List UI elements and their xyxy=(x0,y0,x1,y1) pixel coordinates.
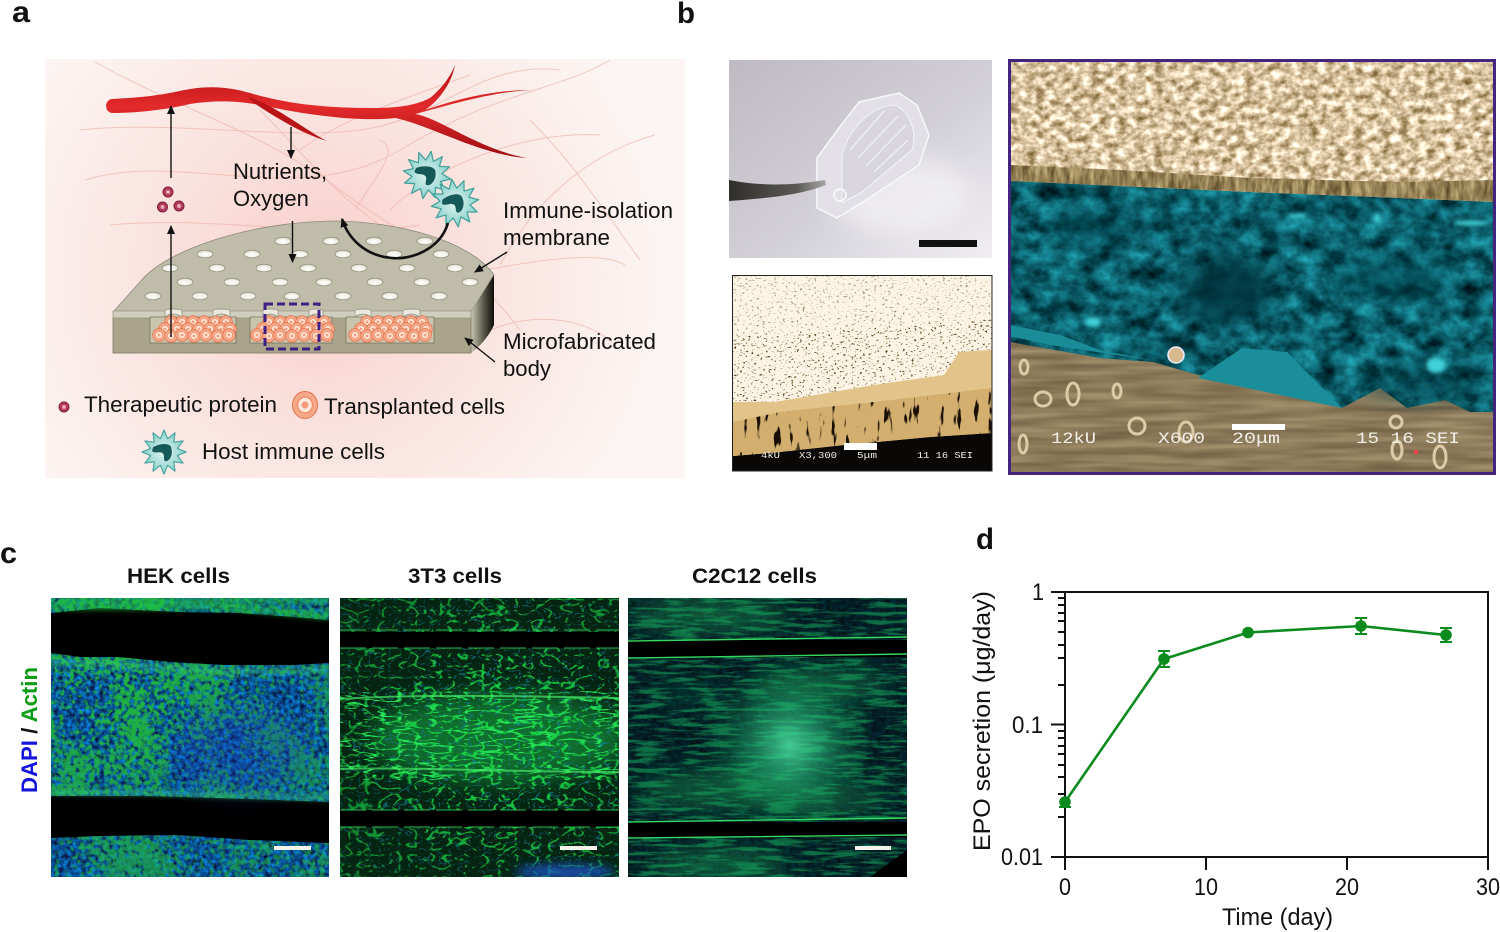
label: nutrients and oxygen: Nutrients, xyxy=(233,159,327,184)
panel d: EPO secretion line chart xyxy=(969,579,1500,931)
label: immune-isolation membrane: membrane xyxy=(503,225,610,250)
panel b: device photo xyxy=(729,60,992,258)
transplanted cells in wells xyxy=(153,316,432,342)
vertical label: DAPI / Actin: DAPI / Actin xyxy=(17,667,42,793)
3T3 scale bar xyxy=(560,846,597,850)
y tick labels: 0.1 xyxy=(1012,712,1043,739)
label: nutrients and oxygen: Oxygen xyxy=(233,186,309,211)
micrograph: C2C12 cells xyxy=(628,598,907,877)
x tick labels: 10 xyxy=(1194,874,1218,901)
SEM 2 annotation: 12kU xyxy=(1051,430,1096,448)
device photo body xyxy=(817,93,929,218)
x tick labels: 20 xyxy=(1335,874,1359,901)
y tick labels: 0.01 xyxy=(1001,844,1043,871)
SEM 1 annotation: 11 16 SEI xyxy=(917,451,973,461)
3T3 black channels xyxy=(340,632,619,827)
wells xyxy=(150,317,434,343)
y tick labels: 1 xyxy=(1032,579,1044,606)
y axis ticks xyxy=(1051,592,1065,857)
debris particles xyxy=(1019,360,1446,468)
panel a background xyxy=(45,59,685,478)
legend: therapeutic protein: Therapeutic protein xyxy=(84,392,277,417)
SEM 1 scale bar xyxy=(844,443,877,450)
membrane cross-section pores xyxy=(165,309,420,317)
label: microfabricated body xyxy=(503,329,656,381)
micrograph: HEK cells xyxy=(51,598,329,877)
panel letter c: c xyxy=(0,537,17,570)
label: microfabricated body: body xyxy=(503,356,552,381)
legend: transplanted cells: Transplanted cells xyxy=(324,394,505,419)
C2C12 black channels xyxy=(628,640,907,877)
SEM 2 annotation: X600 xyxy=(1158,430,1205,448)
bottom substrate xyxy=(1011,342,1493,472)
therapeutic protein particles xyxy=(158,187,184,212)
arrow: immune cells blocked xyxy=(342,219,448,258)
panel letter d: d xyxy=(976,523,994,556)
cross-section wall xyxy=(733,340,992,456)
faint tissue capillaries xyxy=(80,60,655,345)
heading: HEK cells: HEK cells xyxy=(127,565,230,588)
device: microfabricated body xyxy=(113,317,471,353)
SEM 1 frame xyxy=(732,276,992,471)
y tick labels xyxy=(1001,579,1044,871)
arrow: nutrients down xyxy=(291,127,292,262)
legend: host immune cells: Host immune cells xyxy=(202,439,385,464)
panel a: device schematic xyxy=(45,59,685,478)
x axis ticks xyxy=(1065,857,1488,870)
device: membrane edge xyxy=(113,311,471,318)
error bars xyxy=(1059,618,1452,807)
SEM 1 annotation: 5μm xyxy=(857,451,877,461)
C2C12 scale bar xyxy=(855,846,891,850)
label: microfabricated body: Microfabricated xyxy=(503,329,656,354)
tweezers xyxy=(729,180,826,201)
heading: 3T3 cells: 3T3 cells xyxy=(408,565,502,588)
x tick labels: 0 xyxy=(1059,874,1071,901)
photo scale bar xyxy=(919,240,977,247)
arrow: membrane pointer xyxy=(475,252,507,272)
membrane pores xyxy=(145,237,478,300)
data points xyxy=(1059,620,1452,808)
edge band xyxy=(1010,165,1494,202)
teal tissue xyxy=(1010,181,1494,412)
label: immune-isolation membrane xyxy=(503,198,673,250)
SEM 2 purple frame xyxy=(1010,60,1494,474)
device: side wall xyxy=(471,275,494,353)
arrow: body pointer xyxy=(465,338,495,362)
host immune cells attacking xyxy=(399,147,482,230)
legend: host immune cells xyxy=(142,430,385,474)
SEM 1 annotation: 4kU xyxy=(761,451,780,461)
plot frame xyxy=(1065,592,1488,857)
x tick labels xyxy=(1059,874,1500,901)
surface (tan) xyxy=(1010,61,1494,186)
device: membrane top surface xyxy=(113,221,494,312)
dashed highlight box xyxy=(265,304,319,349)
HEK bright band edges xyxy=(51,662,329,798)
x axis title: Time (day) xyxy=(1222,904,1333,931)
SEM 2 scale bar xyxy=(1232,424,1285,430)
y axis title: EPO secretion (μg/day) xyxy=(969,591,996,851)
panel b: SEM of implanted device xyxy=(1010,61,1494,473)
SEM 1 annotation: X3,300 xyxy=(799,451,837,461)
SEM 2 annotation xyxy=(1052,432,1458,446)
panel b: SEM membrane pores xyxy=(733,276,992,471)
arrow: protein to vessel xyxy=(170,106,172,337)
SEM 1 annotation xyxy=(762,452,972,460)
SEM 2 annotation: 20μm xyxy=(1232,430,1280,448)
blood vessel xyxy=(106,65,532,158)
heading: C2C12 cells: C2C12 cells xyxy=(692,565,817,588)
HEK scale bar xyxy=(274,846,311,850)
SEM 2 annotation: 15 16 SEI xyxy=(1356,430,1460,448)
pitted surface xyxy=(733,276,992,402)
data line xyxy=(1065,626,1446,802)
label: immune-isolation membrane: Immune-isolation xyxy=(503,198,673,223)
micrograph: 3T3 cells xyxy=(340,598,630,880)
